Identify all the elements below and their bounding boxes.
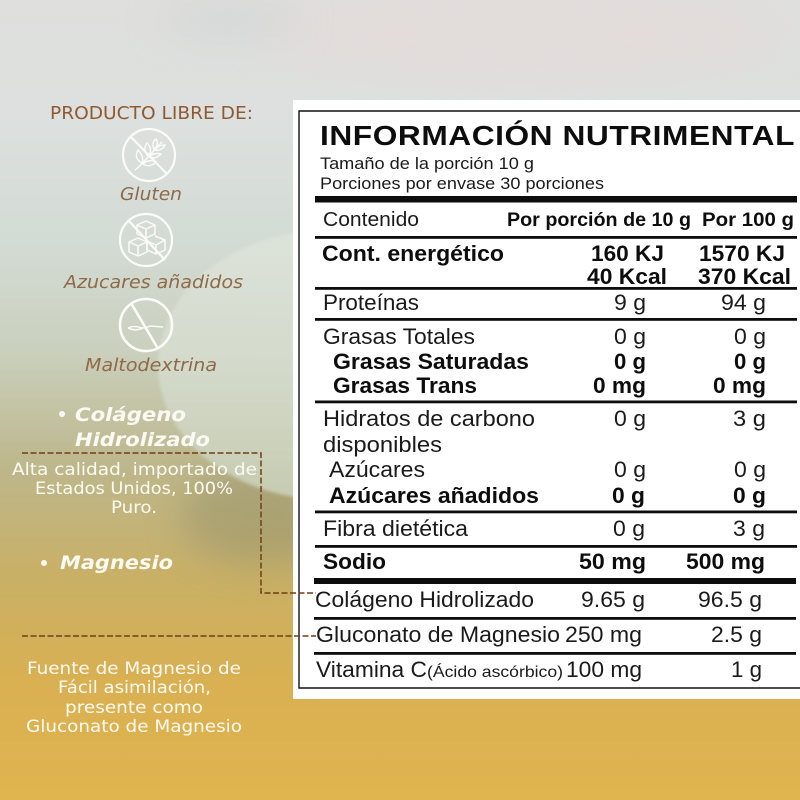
row: protein: 9 g <box>614 290 646 315</box>
label: added sugars: Azucares añadidos <box>63 272 243 293</box>
panel: free-from list <box>50 103 253 376</box>
row: energy: 1570 KJ <box>699 241 785 266</box>
text: magnesium description: Fácil asimilación, <box>58 678 211 698</box>
row: fats: 0 g <box>614 324 646 349</box>
row: magnesium gluconate: 250 mg <box>565 622 642 647</box>
row: fiber <box>323 516 765 541</box>
text: collagen description: Estados Unidos, 100% <box>35 479 233 499</box>
text: collagen description: Puro. <box>111 498 157 518</box>
row: sodium: 50 mg <box>579 549 646 574</box>
icon: no gluten <box>123 129 175 181</box>
text: magnesium description: Fuente de Magnesio de <box>27 659 241 679</box>
row: carbohydrates: disponibles <box>323 432 442 457</box>
row: fats <box>323 324 766 398</box>
connector: magnesium to table <box>22 635 316 637</box>
row: carbohydrates: 0 g <box>733 483 766 508</box>
panel: ingredient notes <box>12 404 257 737</box>
text: serving size: Tamaño de la porción 10 g <box>320 154 534 173</box>
text: collagen description: Alta calidad, importado de <box>12 460 257 480</box>
text: collagen description <box>12 460 257 518</box>
row: sodium: 500 mg <box>686 549 765 574</box>
row: magnesium gluconate: Gluconato de Magnesio <box>316 622 560 647</box>
text: serving size <box>320 154 604 193</box>
label: maltodextrin: Maltodextrina <box>85 355 217 376</box>
row: fats: Grasas Totales <box>323 324 475 349</box>
row: carbohydrates: 0 g <box>612 483 645 508</box>
row: carbohydrates: Azúcares <box>329 457 425 482</box>
row: carbohydrates: 0 g <box>734 457 766 482</box>
row: energy: 370 Kcal <box>698 264 791 289</box>
row: energy <box>322 241 791 289</box>
row: sodium <box>323 549 765 574</box>
row: fiber: Fibra dietética <box>323 516 469 541</box>
row: carbohydrates: Hidratos de carbono <box>323 406 535 431</box>
row: fats: 0 g <box>734 349 766 374</box>
icon: no maltodextrin <box>120 299 172 351</box>
row: fats: Grasas Trans <box>333 373 477 398</box>
bullet heading: collagen: Hidrolizado <box>75 429 210 451</box>
row: carbohydrates: 3 g <box>733 406 766 431</box>
row: vitamin c: 1 g <box>731 657 762 682</box>
icon: no added sugars <box>120 214 172 266</box>
connector: collagen to table <box>22 453 316 593</box>
row: carbohydrates: 0 g <box>614 457 646 482</box>
row: hydrolyzed collagen <box>315 587 762 612</box>
bullet heading: collagen: Colágeno <box>75 404 186 426</box>
row: fats: 0 mg <box>713 373 766 398</box>
row: hydrolyzed collagen: 9.65 g <box>581 587 645 612</box>
row: energy: 40 Kcal <box>587 264 667 289</box>
text: magnesium description <box>26 659 242 737</box>
row: protein <box>323 290 766 315</box>
row: magnesium gluconate: 2.5 g <box>711 622 762 647</box>
row: column headers <box>323 209 794 231</box>
row: hydrolyzed collagen: 96.5 g <box>698 587 762 612</box>
row: sodium: Sodio <box>323 549 386 574</box>
row: fiber: 3 g <box>733 516 765 541</box>
row: protein: Proteínas <box>323 290 419 315</box>
row: fiber: 0 g <box>613 516 645 541</box>
text: magnesium description: presente como <box>65 698 203 718</box>
row: energy: Cont. energético <box>322 241 504 266</box>
row: energy: 160 KJ <box>591 241 664 266</box>
text: magnesium description: Gluconato de Magnesio <box>26 717 242 737</box>
row: column headers: Contenido <box>323 209 419 231</box>
row: column headers: Por 100 g <box>702 210 794 231</box>
bullet heading: collagen <box>59 404 210 451</box>
heading: producto libre de: PRODUCTO LIBRE DE: <box>50 103 253 124</box>
row: protein: 94 g <box>721 290 766 315</box>
row: vitamin c: 100 mg <box>566 657 642 682</box>
row: vitamin c <box>316 657 762 682</box>
row: magnesium gluconate <box>316 622 762 647</box>
row: vitamin c: Vitamina C <box>316 657 427 682</box>
row: column headers: Por porción de 10 g <box>507 210 691 231</box>
row: vitamin c: (Ácido ascórbico) <box>427 662 563 681</box>
panel: nutrition facts label <box>293 100 800 699</box>
row: fats: 0 g <box>734 324 766 349</box>
title: INFORMACIÓN NUTRIMENTAL <box>320 120 795 151</box>
bullet heading: magnesium: Magnesio <box>60 552 173 574</box>
label: gluten: Gluten <box>120 184 182 205</box>
row: carbohydrates: 0 g <box>614 406 646 431</box>
row: fats: Grasas Saturadas <box>333 349 529 374</box>
row: hydrolyzed collagen: Colágeno Hidrolizado <box>315 587 534 612</box>
text: serving size: Porciones por envase 30 porciones <box>320 174 604 193</box>
row: fats: 0 g <box>614 349 646 374</box>
row: carbohydrates <box>323 406 766 508</box>
row: carbohydrates: Azúcares añadidos <box>329 483 539 508</box>
row: fats: 0 mg <box>593 373 646 398</box>
